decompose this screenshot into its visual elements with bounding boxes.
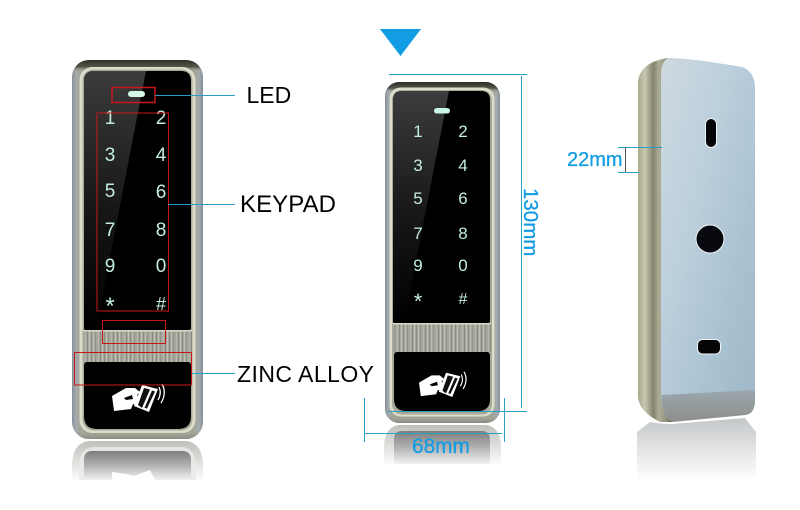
keypad digits: 9 [413,256,423,275]
keypad digits: 0 [458,256,468,275]
lower metal reflection on plate [662,390,755,422]
keypad digits [413,122,468,314]
black touch panel of left device [84,71,191,330]
keypad digits: 5 [105,181,115,202]
side edge of housing [638,58,672,422]
dimension lines [364,74,527,442]
keypad digits: 5 [413,189,423,208]
keypad digits: 7 [105,220,115,241]
LED light [128,91,145,97]
keypad digits: 2 [458,122,468,141]
reflection of middle device [370,425,510,469]
keypad digits: * [105,293,115,320]
keypad digits: 2 [156,108,166,129]
keypad digits: * [414,289,423,314]
device: front view with callouts [60,60,374,486]
back plate [661,58,755,422]
lower rectangular slot [698,340,720,354]
keypad digits: 7 [413,224,423,243]
keypad digits: # [459,291,468,308]
brushed metal band of middle device [393,323,491,352]
reflection of left device [60,441,210,486]
keypad digits: 6 [156,182,166,203]
black reader panel of left device [84,362,191,429]
upper keyhole slot [706,118,716,148]
LED light [434,108,450,114]
keypad digits: 4 [458,156,468,175]
device: side and back view [567,58,756,482]
label: 130mm: 130mm [519,188,542,256]
black reader panel of middle device [394,352,490,411]
device: dimensioned front view [364,74,542,469]
label: LED: LED [246,82,291,108]
centre cable hole [696,225,724,253]
keypad digits [105,108,167,320]
icon: hand holding card with signal waves [419,372,466,397]
label: 68mm: 68mm [412,435,470,458]
keypad digits: # [156,294,166,314]
brushed metal band of left device [83,330,192,362]
keypad digits: 3 [105,145,115,166]
label: ZINC ALLOY: ZINC ALLOY [237,361,374,387]
reflection of back device [637,418,756,482]
red highlight boxes [74,88,192,385]
depth dimension lines [618,147,662,172]
label: 22mm: 22mm [567,149,623,171]
metal frame of middle device [385,82,500,423]
metal frame of left device [72,60,203,439]
keypad digits: 1 [105,108,115,129]
label: KEYPAD: KEYPAD [240,191,336,218]
keypad digits: 8 [458,224,468,243]
callout leader lines [155,96,235,374]
keypad digits: 3 [413,156,423,175]
keypad digits: 6 [458,189,468,208]
keypad digits: 0 [156,256,166,277]
keypad digits: 1 [413,122,423,141]
keypad digits: 9 [105,256,115,277]
marker triangle [380,29,421,56]
keypad digits: 4 [156,145,167,166]
icon: hand holding card with signal waves [112,384,164,412]
black touch panel of middle device [393,91,490,323]
keypad digits: 8 [156,220,166,241]
